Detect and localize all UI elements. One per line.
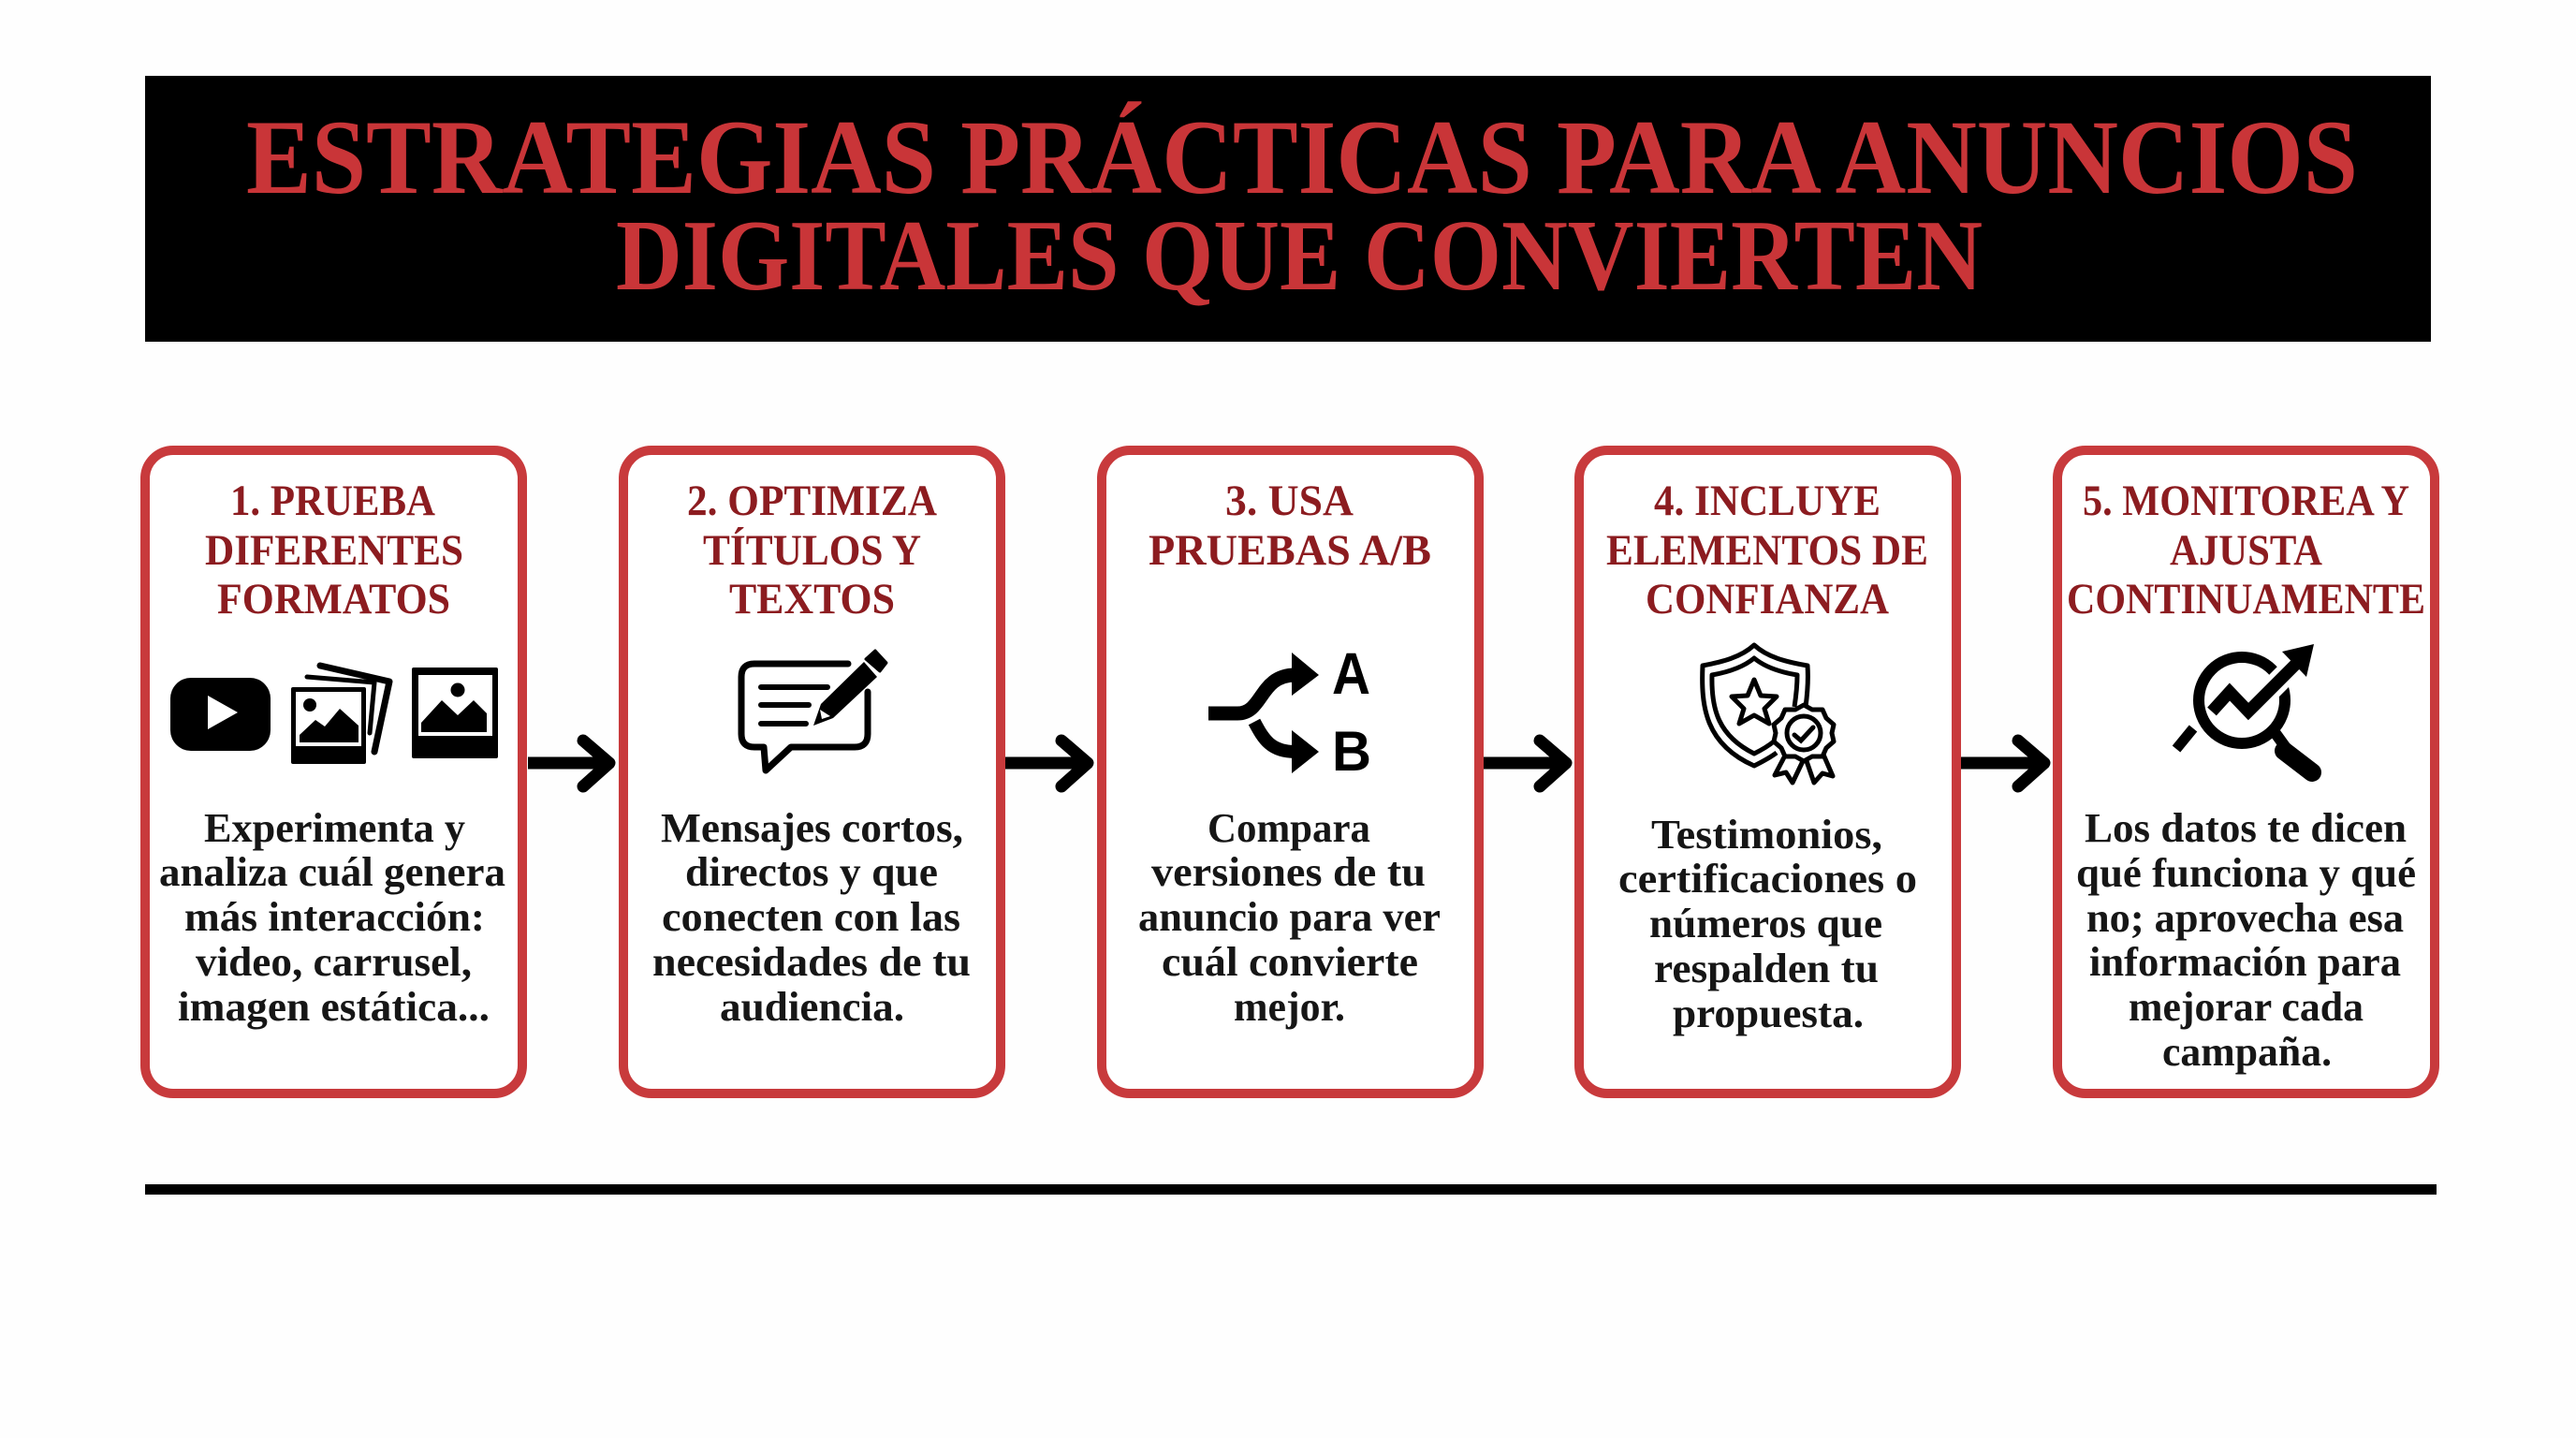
heading: step 1: DIFERENTES	[205, 526, 463, 575]
heading: step 2: 2. OPTIMIZA	[687, 477, 937, 525]
icon: a/b split: B	[1332, 720, 1371, 783]
bottom rule	[145, 1184, 2437, 1195]
title banner	[145, 76, 2431, 342]
text: step 2 description: necesidades de tu	[652, 939, 971, 985]
heading: step 4: 4. INCLUYE	[1654, 477, 1881, 525]
icon: message and pencil	[741, 651, 886, 770]
text: step 3 description: Compara	[1208, 805, 1370, 851]
text: step 5 description: información para	[2089, 939, 2401, 985]
heading: step 5	[2067, 477, 2425, 624]
text: step 3 description: anuncio para ver	[1138, 894, 1441, 940]
icon: static image	[412, 668, 498, 758]
panel: step 3 usa pruebas a/b	[1102, 450, 1479, 1093]
text: step 1 description: imagen estática...	[178, 984, 490, 1030]
text: step 2 description: Mensajes cortos,	[661, 805, 963, 851]
text: step 2 description: conecten con las	[662, 894, 960, 940]
panel: step 2 optimiza titulos y textos	[623, 450, 1001, 1093]
panel: step 4 incluye elementos de confianza	[1579, 450, 1956, 1093]
text: step 1 description: Experimenta y	[204, 805, 465, 851]
icon: video play	[170, 678, 271, 751]
text: step 5 description: mejorar cada	[2129, 984, 2364, 1030]
icon: carousel images	[291, 666, 389, 764]
text: step 3 description: cuál convierte	[1162, 939, 1418, 985]
icon: shield and badge	[1703, 645, 1834, 783]
text: step 4 description: números que	[1649, 901, 1882, 946]
title banner: ESTRATEGIAS PRÁCTICAS PARA ANUNCIOS	[246, 99, 2358, 216]
text: step 5 description: qué funciona y qué	[2076, 850, 2416, 896]
heading: step 2: TÍTULOS Y	[703, 526, 921, 575]
text: step 4 description: propuesta.	[1673, 990, 1864, 1036]
icon: magnifier with growth chart	[2176, 644, 2314, 772]
text: step 2 description: audiencia.	[720, 984, 904, 1030]
heading: step 5: AJUSTA	[2170, 526, 2322, 575]
text: step 5 description	[2076, 805, 2416, 1075]
text: step 4 description: respalden tu	[1654, 946, 1879, 991]
text: step 1 description: video, carrusel,	[196, 939, 472, 985]
arrow: step 4 to 5	[1961, 741, 2044, 786]
text: step 2 description	[652, 805, 971, 1030]
heading: step 2: TEXTOS	[729, 575, 895, 624]
heading: step 4: ELEMENTOS DE	[1606, 526, 1928, 575]
heading: step 4: CONFIANZA	[1646, 575, 1889, 624]
arrow: step 3 to 4	[1484, 741, 1566, 786]
text: step 3 description: versiones de tu	[1151, 849, 1426, 895]
arrow: step 2 to 3	[1005, 741, 1088, 786]
heading: step 4	[1606, 477, 1928, 624]
text: step 5 description: Los datos te dicen	[2085, 805, 2407, 851]
heading: step 3	[1149, 477, 1431, 575]
title banner: DIGITALES QUE CONVIERTEN	[616, 200, 1983, 312]
text: step 3 description	[1138, 805, 1441, 1030]
text: step 3 description: mejor.	[1234, 984, 1345, 1030]
arrow: step 1 to 2	[528, 741, 609, 786]
text: step 4 description: certificaciones o	[1618, 856, 1917, 902]
text: step 4 description	[1618, 812, 1917, 1036]
text: step 5 description: no; aprovecha esa	[2086, 895, 2404, 941]
heading: step 1: 1. PRUEBA	[230, 477, 435, 525]
text: step 1 description: más interacción:	[184, 894, 485, 940]
text: step 5 description: campaña.	[2162, 1029, 2332, 1075]
text: step 1 description	[159, 805, 505, 1030]
heading: step 5: CONTINUAMENTE	[2067, 575, 2425, 624]
icon: a/b split: A	[1332, 641, 1370, 707]
panel: step 1 prueba diferentes formatos	[145, 450, 522, 1093]
heading: step 3: PRUEBAS A/B	[1149, 526, 1431, 575]
heading: step 2	[687, 477, 937, 624]
heading: step 1	[205, 477, 463, 624]
heading: step 1: FORMATOS	[217, 575, 450, 624]
heading: step 5: 5. MONITOREA Y	[2083, 477, 2409, 525]
icon: a/b split	[1208, 641, 1371, 783]
text: step 4 description: Testimonios,	[1651, 812, 1882, 858]
text: step 1 description: analiza cuál genera	[159, 849, 505, 895]
text: step 2 description: directos y que	[685, 849, 938, 895]
panel: step 5 monitorea y ajusta continuamente	[2057, 450, 2435, 1093]
heading: step 3: 3. USA	[1225, 477, 1354, 525]
